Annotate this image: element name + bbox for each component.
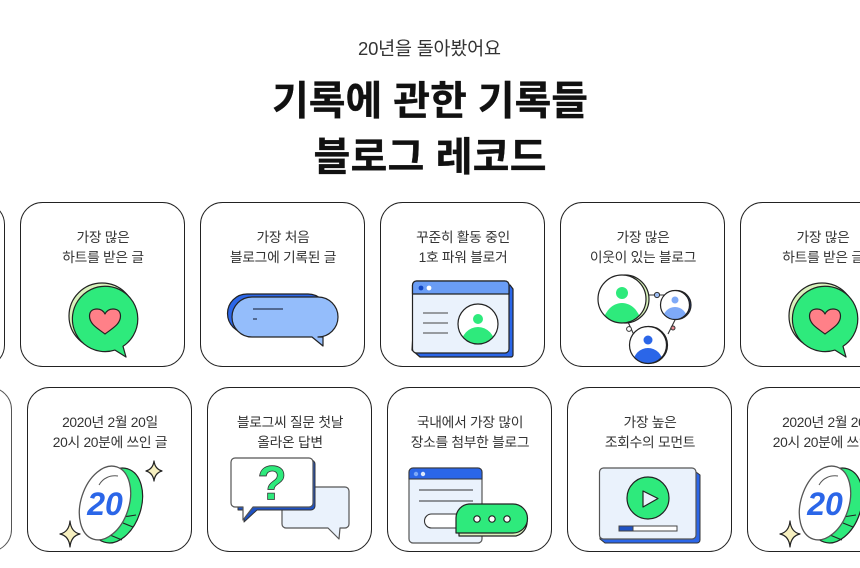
title: 기록에 관한 기록들	[272, 80, 588, 124]
label: 가장 처음	[256, 230, 310, 245]
panel: most places attached blog	[388, 388, 552, 552]
label	[237, 415, 344, 450]
label: 가장 많은	[796, 230, 850, 245]
label: 장소를 첨부한 블로그	[411, 435, 529, 450]
label: 블로그에 기록된 글	[230, 250, 336, 265]
label: 올라온 답변	[257, 435, 323, 450]
icon: question speech bubbles	[231, 458, 349, 539]
panel: first post	[200, 202, 364, 366]
label	[416, 230, 510, 265]
title: 블로그 레코드	[314, 136, 546, 180]
label	[53, 415, 167, 450]
panel: highest view moment	[568, 388, 732, 552]
label: 2020년 2월 20일	[62, 415, 158, 430]
label: 국내에서 가장 많이	[417, 415, 523, 430]
panel: most hearts post repeated	[740, 202, 860, 366]
panel: most hearts post	[20, 202, 184, 366]
label: 가장 많은	[616, 230, 670, 245]
label: 20시 20분에 쓰인 글	[53, 435, 167, 450]
icon: heart speech bubble	[789, 283, 858, 357]
icon: video player	[600, 468, 700, 543]
icon: question speech bubbles: ?	[257, 458, 287, 510]
label	[605, 415, 695, 450]
label: 블로그씨 질문 첫날	[237, 415, 344, 430]
label	[590, 230, 696, 265]
icon: profile window	[412, 281, 513, 363]
label	[230, 230, 336, 265]
icon: window with green bubble	[409, 468, 528, 543]
label: 꾸준히 활동 중인	[416, 230, 510, 245]
panel: cut-off card row 1 left	[0, 202, 4, 367]
subtitle: 20년을 돌아봤어요	[358, 38, 501, 59]
panel: first power blogger	[380, 202, 544, 366]
icon: coin with sparkles: 20	[806, 486, 843, 522]
label	[411, 415, 529, 450]
label: 가장 많은	[76, 230, 130, 245]
icon: coin with sparkles: 20	[86, 486, 123, 522]
label	[782, 230, 860, 265]
label	[62, 230, 144, 265]
label: 가장 높은	[623, 415, 677, 430]
panel: post at 2020-02-20 20:20	[28, 388, 192, 552]
label: 1호 파워 블로거	[419, 250, 507, 265]
panel: post at 2020-02-20 20:20 repeated	[748, 388, 860, 552]
icon: coin with sparkles	[60, 459, 162, 550]
label: 이웃이 있는 블로그	[590, 250, 696, 265]
title	[272, 80, 588, 180]
icon: blue speech bubble	[228, 294, 338, 346]
panel: first question answer	[208, 388, 372, 552]
icon: neighbor network	[598, 275, 691, 376]
icon: heart speech bubble	[69, 283, 138, 357]
label: 조회수의 모먼트	[605, 435, 695, 450]
label	[773, 415, 860, 450]
panel: most neighbors blog	[560, 202, 724, 376]
panel: cut-off card row 2 left	[0, 388, 12, 552]
icon: coin with sparkles	[780, 459, 860, 550]
label: 하트를 받은 글	[62, 250, 144, 265]
